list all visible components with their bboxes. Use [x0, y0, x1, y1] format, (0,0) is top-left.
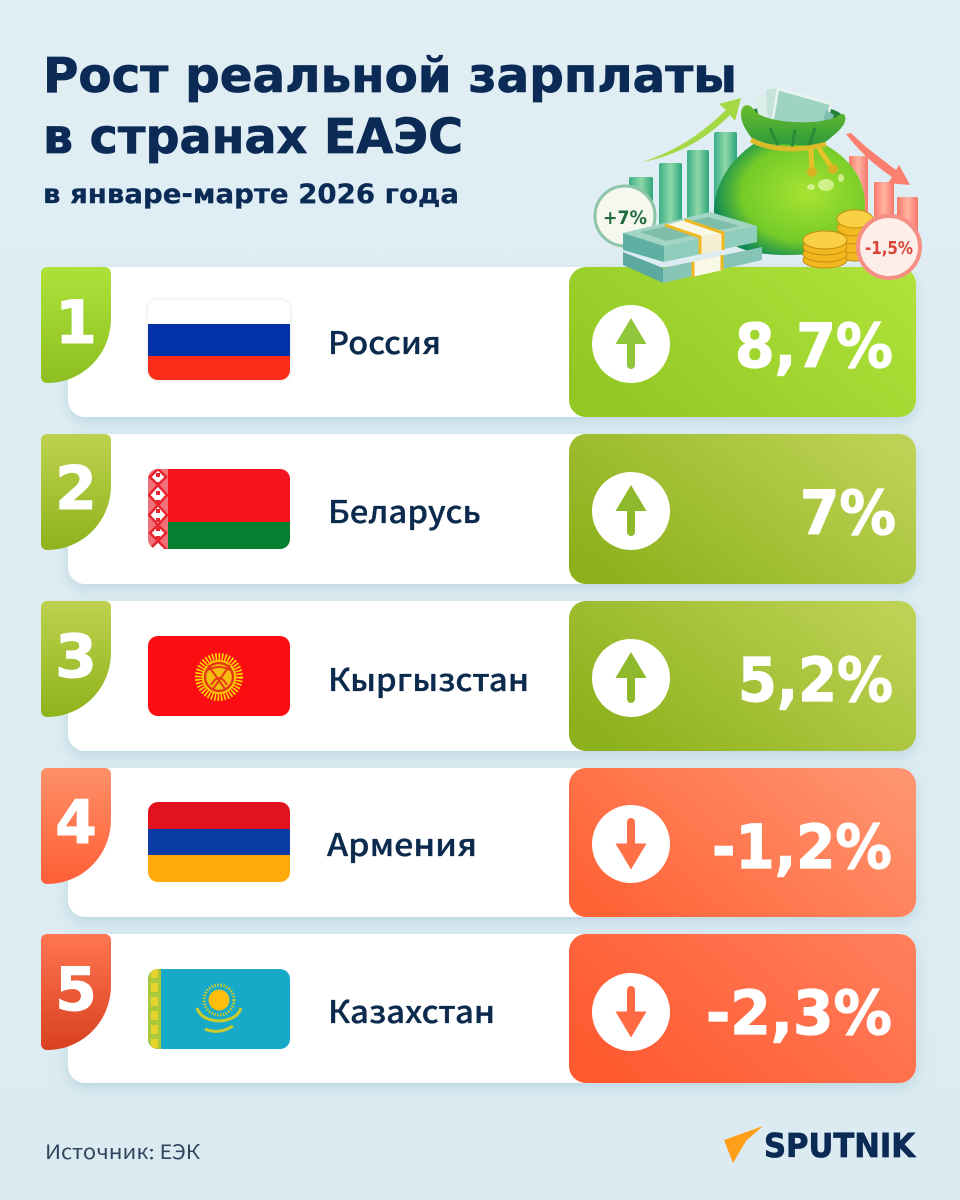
- rank badge: [41, 934, 111, 1050]
- bag neck: [741, 105, 845, 146]
- banknotes in bag: [755, 88, 834, 137]
- card: [68, 267, 916, 417]
- card: [68, 434, 916, 584]
- country name: Казахстан: [328, 987, 495, 1032]
- money bag: [714, 88, 865, 255]
- +7% badge: +7%: [603, 207, 647, 229]
- rank number: 5: [55, 955, 97, 1025]
- rank number: 1: [55, 288, 97, 358]
- value: 7%: [800, 478, 896, 549]
- stacks of cash: [623, 212, 762, 283]
- row 3: Kyrgyzstan: [41, 601, 916, 751]
- icon: up arrow: [592, 639, 670, 717]
- country name: Беларусь: [328, 487, 481, 532]
- bag highlight: [807, 174, 844, 191]
- card: [68, 934, 916, 1083]
- upper stack: [623, 212, 757, 246]
- value: -1,2%: [712, 812, 892, 883]
- value panel: [569, 267, 916, 417]
- rank badge: [41, 768, 111, 884]
- value: 5,2%: [738, 645, 893, 716]
- value panel: [569, 768, 916, 917]
- value panel: [569, 434, 916, 584]
- rank number: 3: [55, 622, 97, 692]
- country name: Кыргызстан: [328, 655, 529, 700]
- subtitle: в январе-марте 2026 года: [43, 179, 459, 210]
- -1,5% badge: -1,5%: [865, 238, 913, 259]
- illustration: money bag with charts: [595, 88, 920, 283]
- flag: Russia: [148, 300, 290, 380]
- rank number: 2: [55, 454, 97, 524]
- bag body: [714, 143, 865, 255]
- coins: [803, 210, 873, 268]
- value: -2,3%: [706, 978, 892, 1049]
- rank badge: [41, 267, 111, 383]
- row 5: Kazakhstan: [41, 934, 916, 1083]
- flag: Kazakhstan: [148, 969, 290, 1049]
- card: [68, 601, 916, 751]
- value panel: [569, 601, 916, 751]
- back rim: [743, 104, 843, 132]
- neck folds: [770, 128, 815, 148]
- red decline arrow: [846, 133, 910, 185]
- country name: Россия: [328, 318, 441, 363]
- title: [43, 48, 737, 165]
- rank badge: [41, 601, 111, 717]
- rank badge: [41, 434, 111, 550]
- icon: up arrow: [592, 472, 670, 550]
- row 4: Armenia: [41, 768, 916, 917]
- rope tassels: [807, 150, 838, 177]
- logo: Sputnik: SPUTNIK: [764, 1126, 916, 1165]
- flag: Armenia: [148, 802, 290, 882]
- country name: Армения: [327, 820, 477, 865]
- icon: down arrow: [592, 805, 670, 883]
- value: 8,7%: [735, 311, 893, 382]
- flag: Belarus: [148, 469, 290, 557]
- red decline bars: [849, 156, 918, 242]
- +7% badge: [595, 186, 655, 246]
- title: в странах ЕАЭС: [43, 109, 463, 165]
- card: [68, 768, 916, 917]
- row 2: Belarus: [41, 434, 916, 584]
- green growth arrow: [642, 98, 741, 162]
- icon: up arrow: [592, 305, 670, 383]
- row 1: Russia: [41, 267, 916, 417]
- title: Рост реальной зарплаты: [43, 48, 737, 104]
- -1,5% badge: [858, 216, 920, 278]
- rank number: 4: [55, 788, 97, 858]
- rope: [751, 140, 826, 149]
- icon: down arrow: [592, 973, 670, 1051]
- flag: Kyrgyzstan: [148, 636, 290, 716]
- lower stack: [623, 252, 663, 283]
- value panel: [569, 934, 916, 1083]
- source: Источник: ЕЭК: [45, 1136, 200, 1165]
- green growth bars: [629, 132, 737, 233]
